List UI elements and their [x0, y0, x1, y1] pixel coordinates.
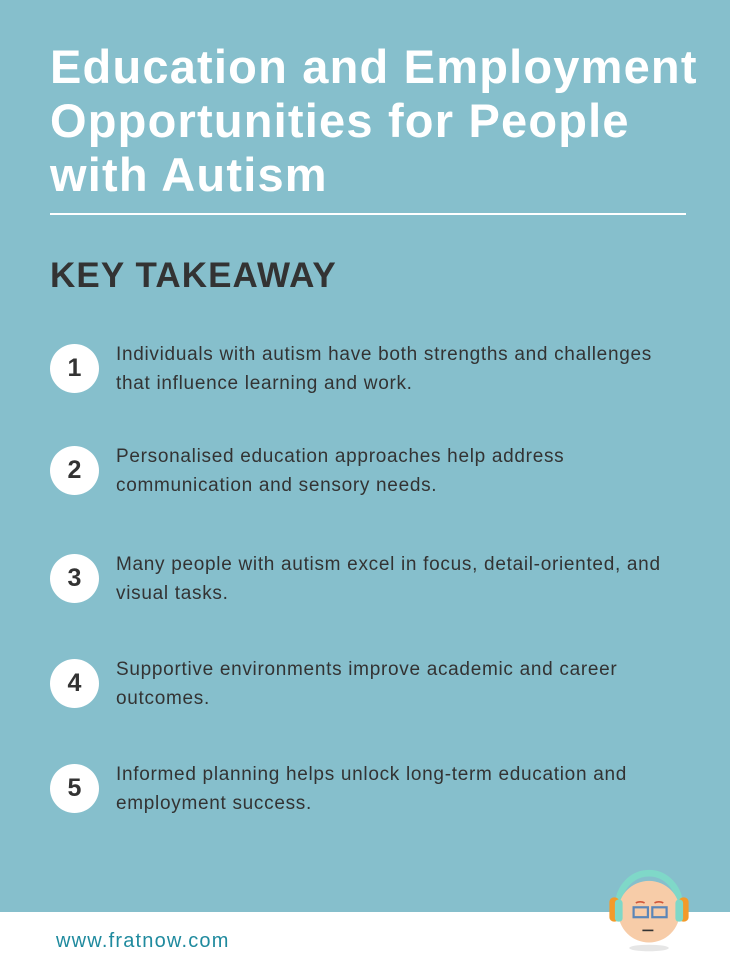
item 1: Individuals with autism have both strengths and challenges [116, 344, 652, 365]
item 5: 5 [68, 774, 81, 802]
footer: www.fratnow.com [56, 930, 230, 952]
item 5 [50, 764, 627, 814]
title: Education and Employment [50, 40, 698, 93]
footer [0, 912, 730, 979]
item 2 [50, 446, 564, 496]
heading: key takeaway: KEY TAKEAWAY [50, 256, 337, 295]
item 5: Informed planning helps unlock long-term education and [116, 764, 627, 785]
item 3 [50, 554, 661, 604]
item 1 [50, 344, 652, 394]
item 1: 1 [68, 354, 81, 382]
item 3: 3 [68, 564, 81, 592]
item 2: 2 [68, 456, 81, 484]
item 1: that influence learning and work. [116, 372, 413, 394]
title [50, 40, 698, 201]
item 2: communication and sensory needs. [116, 474, 437, 496]
title: with Autism [50, 148, 328, 201]
item 2: Personalised education approaches help address [116, 446, 564, 467]
item 4: outcomes. [116, 688, 210, 708]
item 5: employment success. [116, 792, 312, 814]
item 3: Many people with autism excel in focus, detail-oriented, and [116, 554, 661, 575]
item 4: Supportive environments improve academic and career [116, 659, 617, 680]
item 3: visual tasks. [116, 582, 229, 604]
item 4: 4 [68, 669, 81, 697]
title: Opportunities for People [50, 94, 630, 147]
item 4 [50, 659, 617, 708]
icon: avatar with headphones [609, 870, 689, 952]
